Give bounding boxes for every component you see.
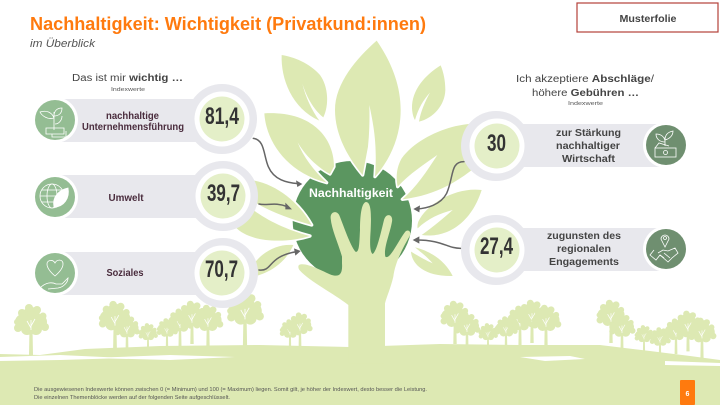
central tree illustration bbox=[235, 41, 487, 363]
item: zur Stärkung nachhaltiger Wirtschaft 30: Wirtschaft bbox=[562, 154, 616, 165]
heading: right column: höhere Gebühren … bbox=[532, 88, 639, 99]
item: zur Stärkung nachhaltiger Wirtschaft 30: 30 bbox=[487, 130, 506, 157]
item: zur Stärkung nachhaltiger Wirtschaft 30: zur Stärkung bbox=[556, 128, 621, 139]
footnote: Die ausgewiesenen Indexwerte können zwischen 0 (= Minimum) und 100 (= Maximum) liegen. Somit gilt, je höher der Indexwert, desto besser die Leistung. bbox=[34, 387, 427, 393]
green globe bbox=[293, 161, 412, 280]
item: zur Stärkung nachhaltiger Wirtschaft 30: nachhaltiger bbox=[556, 141, 620, 152]
icon: heart in hand bbox=[40, 260, 68, 289]
item: nachhaltige Unternehmensführung 81,4: 81,4 bbox=[205, 103, 239, 130]
hand bbox=[298, 202, 410, 363]
label: Musterfolie: Musterfolie bbox=[620, 14, 677, 25]
icon: plant on coins bbox=[40, 108, 66, 137]
item: zur Stärkung nachhaltiger Wirtschaft 30 bbox=[461, 111, 689, 181]
title: Nachhaltigkeit: Wichtigkeit (Privatkund:innen) bbox=[30, 14, 426, 34]
item: Soziales 70,7 bbox=[32, 238, 258, 308]
item: Umwelt 39,7: 39,7 bbox=[207, 180, 240, 207]
footnote: Die einzelnen Themenblöcke werden auf der folgenden Seite aufgeschlüsselt. bbox=[34, 395, 230, 401]
icon: plant on banknote bbox=[655, 131, 676, 157]
footnote bbox=[34, 387, 427, 401]
item: zugunsten des regionalen Engagements 27,4: Engagements bbox=[549, 257, 619, 268]
icon: handshake with location pin bbox=[650, 235, 678, 262]
item: Umwelt 39,7 bbox=[32, 161, 258, 231]
heading: right column bbox=[516, 74, 654, 107]
center label: Nachhaltigkeit bbox=[309, 186, 393, 200]
item: zugunsten des regionalen Engagements 27,4: regionalen bbox=[557, 244, 611, 255]
item: nachhaltige Unternehmensführung 81,4 bbox=[32, 84, 257, 154]
page number bbox=[680, 380, 695, 405]
item: zugunsten des regionalen Engagements 27,4: 27,4 bbox=[480, 233, 513, 260]
item: Umwelt 39,7: Umwelt bbox=[108, 193, 144, 204]
label: Musterfolie bbox=[577, 3, 718, 32]
heading: right column: Indexwerte bbox=[568, 101, 603, 107]
item: Soziales 70,7: 70,7 bbox=[205, 256, 238, 283]
heading: left column bbox=[72, 73, 183, 93]
item: zugunsten des regionalen Engagements 27,4: zugunsten des bbox=[547, 231, 621, 242]
item: Soziales 70,7: Soziales bbox=[106, 268, 144, 279]
page number: 6 bbox=[686, 391, 690, 398]
icon: globe with leaf bbox=[40, 184, 68, 208]
leaves bbox=[235, 41, 487, 278]
connector arrows bbox=[253, 138, 464, 270]
heading: left column: Das ist mir wichtig … bbox=[72, 73, 183, 84]
item: nachhaltige Unternehmensführung 81,4: Unternehmensführung bbox=[82, 122, 184, 133]
item: nachhaltige Unternehmensführung 81,4: nachhaltige bbox=[106, 111, 159, 122]
heading: left column: Indexwerte bbox=[111, 87, 145, 93]
heading: right column: Ich akzeptiere Abschläge / bbox=[516, 74, 654, 85]
background landscape with trees bbox=[0, 292, 720, 405]
subtitle: im Überblick bbox=[30, 38, 96, 50]
item: zugunsten des regionalen Engagements 27,4 bbox=[461, 215, 689, 285]
